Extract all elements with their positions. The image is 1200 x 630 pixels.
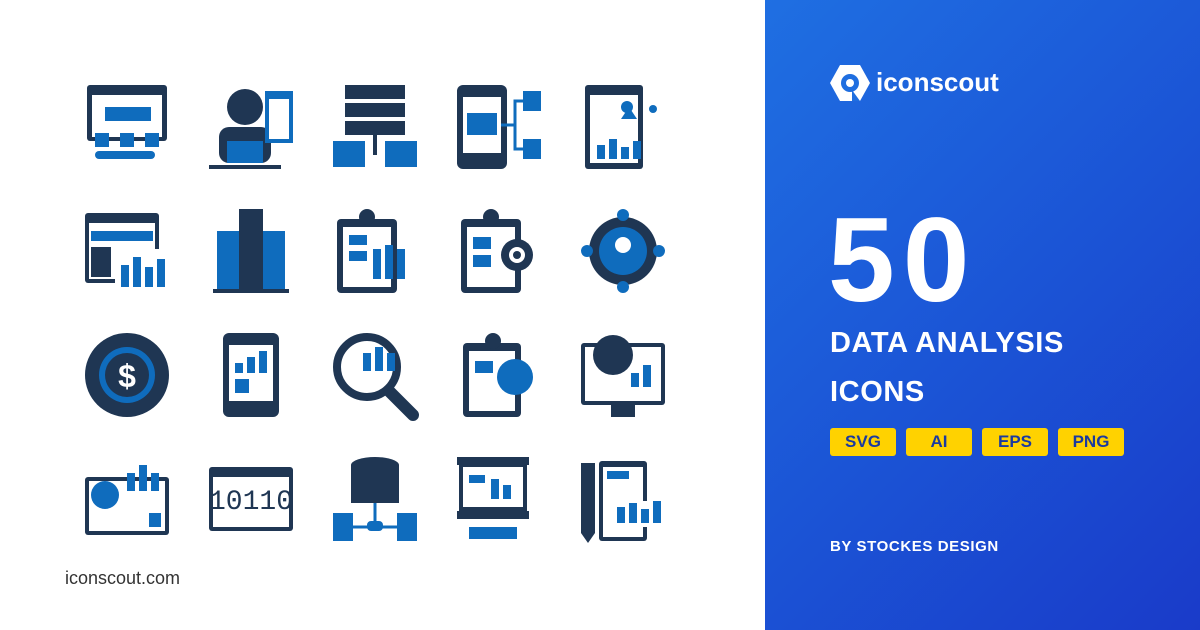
- icon: phone chart: [223, 333, 279, 417]
- title: DATA ANALYSIS: [830, 327, 1064, 359]
- footer url: iconscout.com: [65, 568, 180, 588]
- right panel: EPS: [998, 432, 1032, 451]
- title: [830, 327, 1064, 408]
- logo: iconscout: [876, 67, 999, 97]
- right panel: [765, 0, 1200, 630]
- icon: clipboard target: [461, 209, 533, 293]
- big number: 50: [828, 193, 977, 327]
- icon: dollar coin: $: [118, 358, 136, 394]
- icon: database network: [333, 457, 417, 541]
- icon: clipboard chart: [337, 209, 405, 293]
- icon: monitor pie: [581, 335, 665, 417]
- title: ICONS: [830, 376, 925, 408]
- icon: user target: [581, 209, 665, 293]
- format badges: [830, 428, 1124, 456]
- right panel: PNG: [1073, 432, 1109, 451]
- icon: presentation board: [457, 457, 529, 539]
- icon: buildings: [213, 209, 289, 293]
- icon: magnifier chart: [337, 337, 413, 415]
- right panel: SVG: [845, 432, 881, 451]
- logo: [830, 65, 999, 101]
- icon: woman with laptop: [209, 89, 293, 169]
- icon: web chart: [85, 213, 167, 289]
- icon: pencil document: [581, 461, 665, 543]
- icon: web layout: [87, 85, 167, 159]
- icon: lab chart: [585, 85, 657, 169]
- icon: dollar coin: [85, 333, 169, 417]
- icon: binary window: 10110: [209, 487, 293, 518]
- right panel: AI: [930, 432, 948, 451]
- icon: phone folder: [457, 85, 541, 169]
- icon grid: [85, 85, 665, 543]
- author: BY STOCKES DESIGN: [830, 538, 999, 555]
- icon: binary window: [209, 467, 293, 531]
- icon: server network: [333, 85, 417, 167]
- icon: dashboard: [85, 465, 169, 535]
- icon: clipboard pie: [463, 333, 533, 417]
